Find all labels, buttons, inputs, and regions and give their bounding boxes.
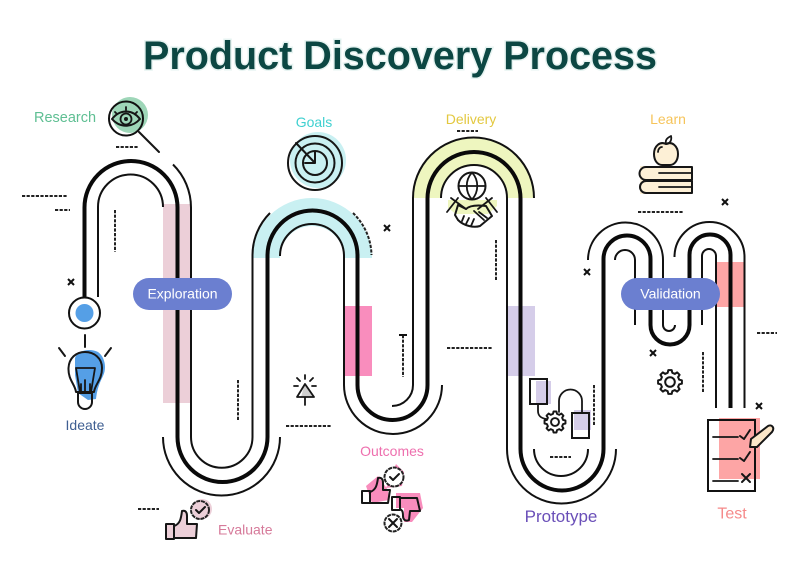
label: Prototype: Prototype [525,507,597,526]
icon: research magnifier [109,97,159,152]
decorative dashes and cross marks [22,131,777,509]
pill: Exploration [133,278,232,310]
winding process path [84,138,744,504]
icon: apple and books [640,136,692,194]
pill: Validation: Validation [640,286,701,302]
label: Learn: Learn [650,111,686,127]
pill: Exploration: Exploration [147,286,218,302]
label: Test: Test [717,506,747,522]
label: Evaluate: Evaluate [218,522,273,538]
icon: test checklist and pencil [708,418,773,491]
pill: Validation [621,278,720,310]
icon: globe and handshake [447,172,497,227]
label: Goals: Goals [296,114,332,130]
icon: spark and triangle [294,375,316,405]
label: Ideate: Ideate [66,417,105,433]
label: Delivery: Delivery [446,111,496,127]
title: Product Discovery Process [143,34,657,78]
icon: gear [658,370,682,394]
label: Outcomes: Outcomes [360,443,424,459]
icon: evaluate thumbs up [166,499,212,539]
colour highlights on the path [163,138,744,403]
icon: outcomes thumbs [362,464,423,532]
icon: prototype flow [530,379,591,438]
icon: lightbulb [59,335,111,409]
icon: goals target [288,132,346,190]
start node [69,298,100,328]
label: Research: Research [34,110,96,126]
